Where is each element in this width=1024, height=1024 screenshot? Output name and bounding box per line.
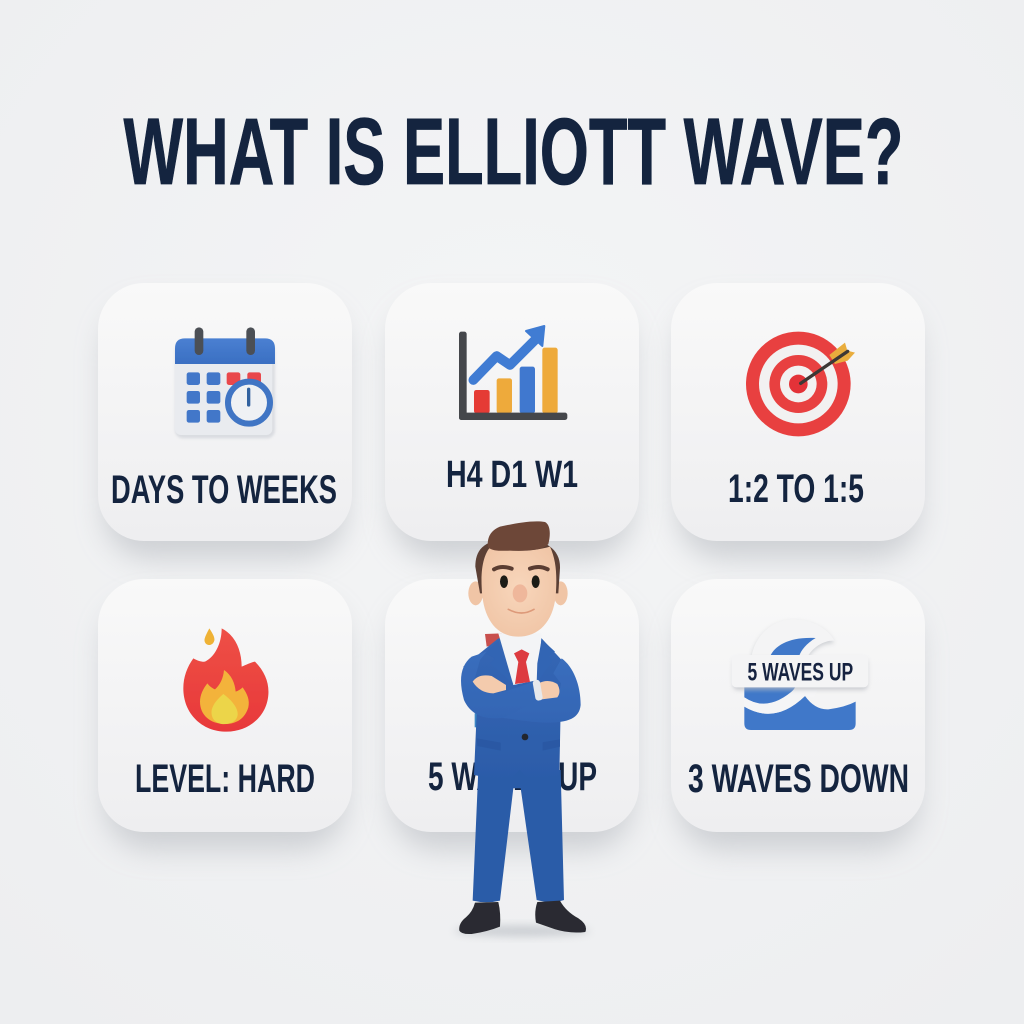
eyebrows (494, 567, 512, 569)
jacket (463, 638, 562, 778)
badge label: 5 WAVES UP (747, 659, 853, 687)
label: DAYS TO WEEKS (111, 468, 337, 512)
mouth (508, 609, 534, 613)
label: 1:2 TO 1:5 (728, 467, 864, 511)
face (482, 547, 556, 637)
backpack hints (485, 633, 502, 647)
hand: viewer left (473, 675, 506, 693)
icon: wave badge (732, 619, 868, 730)
arm: viewer left (461, 652, 538, 718)
label: 5 WAVES UP (428, 755, 597, 799)
eyes (500, 575, 508, 588)
panel: five waves up (385, 579, 639, 850)
panel: three waves down (671, 579, 925, 850)
shirt (498, 633, 542, 685)
hand: viewer right (538, 681, 559, 699)
panel: timeframes (385, 283, 639, 559)
label: LEVEL: HARD (135, 757, 315, 801)
panel: risk reward (671, 283, 925, 559)
ears (468, 581, 483, 605)
cuff (532, 679, 543, 701)
tie (514, 649, 530, 684)
icon: flame (183, 628, 268, 732)
label: 3 WAVES DOWN (688, 757, 909, 801)
icon: calendar with clock (175, 327, 275, 438)
arm: viewer right (500, 658, 581, 723)
icon: bar chart with rising arrow (459, 326, 567, 420)
character: businessman (454, 521, 590, 937)
trousers (473, 770, 564, 902)
hair top (488, 521, 550, 551)
buttons and pockets (522, 734, 528, 740)
panel: difficulty level (98, 579, 352, 850)
shoes (459, 902, 500, 934)
nose (513, 584, 527, 602)
lapels (485, 641, 513, 684)
icon: target with arrow (746, 332, 855, 436)
panel: days to weeks (98, 283, 352, 559)
label: H4 D1 W1 (446, 454, 578, 496)
hair back (475, 538, 560, 593)
